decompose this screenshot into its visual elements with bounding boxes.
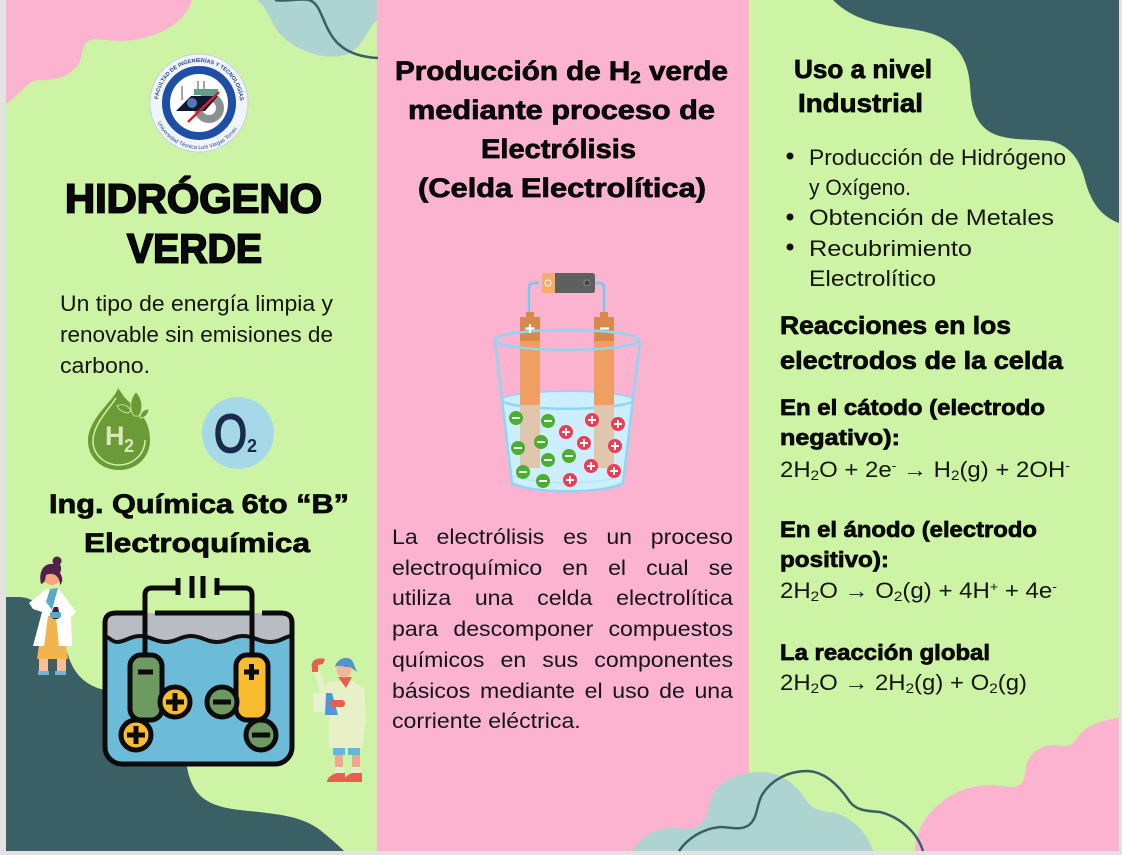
blob: bottom-right pink <box>915 718 1119 851</box>
text block: anode reaction: 2 <box>894 588 903 604</box>
panel: middle pink background <box>377 0 749 851</box>
text block: anode reaction: + <box>990 579 998 594</box>
text block: electrolysis description <box>392 526 733 733</box>
icon: electrolysis beaker <box>495 273 640 491</box>
blob: top-right dark <box>833 0 1119 223</box>
text block: anode reaction: positivo): <box>780 547 889 572</box>
text block: cathode reaction: - <box>1065 458 1070 473</box>
text block: anode reaction: - <box>1052 579 1057 594</box>
heading: electrolysis title: Producción de H <box>395 56 610 86</box>
text block: anode reaction: 2H <box>780 578 808 603</box>
icon: H2 green drop <box>88 388 150 470</box>
text block: global reaction: 2 <box>989 680 998 696</box>
text block: definition: Un tipo de energía limpia y <box>60 291 333 316</box>
blob: top teal <box>257 0 377 57</box>
heading: electrolysis title <box>395 56 728 203</box>
text block: cathode reaction: 2 <box>811 467 819 483</box>
panel: right green background <box>749 0 1119 851</box>
curve: top dark line <box>275 0 378 58</box>
heading: electrolysis title: (Celda Electrolítica) <box>418 173 706 203</box>
heading: electrode reactions: electrodos de la celda <box>780 347 1064 375</box>
icon: H2 green drop: H <box>105 421 124 451</box>
text block: global reaction <box>780 640 1027 696</box>
text block: cathode reaction: negativo): <box>780 425 900 450</box>
text block: anode reaction: O → O <box>819 578 894 603</box>
text block: cathode reaction: En el cátodo (electrodo <box>780 395 1045 420</box>
heading: electrolysis title: 2 <box>630 68 641 87</box>
heading: course <box>49 489 349 558</box>
text block: global reaction: (g) <box>998 670 1027 695</box>
text block: anode reaction: En el ánodo (electrodo <box>780 517 1037 542</box>
text block: cathode reaction <box>780 395 1070 483</box>
text block: definition: carbono. <box>60 353 150 378</box>
text block: anode reaction: + 4e <box>998 578 1052 603</box>
panel: left green background <box>6 0 377 851</box>
icon: man scientist <box>312 658 366 782</box>
text block: global reaction: La reacción global <box>780 640 990 665</box>
title: VERDE <box>127 226 262 272</box>
list: industrial uses <box>786 145 1066 291</box>
text block: anode reaction <box>780 517 1057 604</box>
blob: bottom teal <box>632 772 873 851</box>
text block: anode reaction: 2 <box>811 588 819 604</box>
text block: global reaction: 2 <box>811 680 819 696</box>
text block: cathode reaction: O + 2e <box>819 457 892 482</box>
text block: electrolysis description: La electrólisis es un proceso <box>392 526 733 549</box>
list: industrial uses: Producción de Hidrógeno <box>809 145 1066 170</box>
blob: bottom-left dark <box>6 597 344 851</box>
curve: bottom dark line <box>679 771 923 851</box>
text block: cathode reaction: 2H <box>780 457 808 482</box>
title <box>65 176 322 272</box>
logo: university emblem: Universidad Técnica Luis Vargas Torres <box>158 121 237 149</box>
text block: cathode reaction: 2 <box>951 467 960 483</box>
icon: O2 blue circle <box>202 397 274 469</box>
text block: global reaction: 2 <box>906 680 914 696</box>
text block: electrolysis description: electroquímico en el cual se <box>392 557 733 580</box>
text block: global reaction: (g) + O <box>914 670 989 695</box>
heading: course: Ing. Química 6to “B” <box>49 489 349 519</box>
heading: electrolysis title: verde <box>641 56 728 86</box>
text block: definition <box>60 291 333 378</box>
list: industrial uses: Obtención de Metales <box>809 205 1054 230</box>
text block: anode reaction: (g) + 4H <box>902 578 990 603</box>
text block: global reaction: O → 2H <box>819 670 906 695</box>
heading: course: Electroquímica <box>84 528 311 558</box>
icon: woman scientist <box>29 556 76 675</box>
logo: university emblem: FACULTAD DE INGENIERÍAS Y TECNOLOGÍAS <box>154 58 244 100</box>
text block: cathode reaction: (g) + 2OH <box>959 457 1065 482</box>
text block: electrolysis description: para descomponer compuestos <box>392 618 733 641</box>
list: industrial uses: y Oxígeno. <box>809 175 911 200</box>
list: industrial uses: Electrolítico <box>809 266 936 291</box>
title: HIDRÓGENO <box>65 176 322 222</box>
logo: university emblem <box>150 54 248 152</box>
heading: industrial use: Industrial <box>798 88 923 118</box>
text block: definition: renovable sin emisiones de <box>60 322 333 347</box>
icon: O2 blue circle: O <box>214 404 247 464</box>
list: industrial uses: Recubrimiento <box>809 236 972 261</box>
text block: electrolysis description: químicos en sus componentes <box>392 649 733 672</box>
text block: cathode reaction: - <box>892 458 896 473</box>
icon: H2 green drop: 2 <box>124 436 134 456</box>
heading: electrolysis title: mediante proceso de <box>408 95 715 125</box>
icon: electrochemical cell <box>105 576 292 764</box>
blob: top-left pink <box>6 0 192 104</box>
text block: electrolysis description: corriente eléctrica. <box>392 710 581 733</box>
text block: electrolysis description: básicos mediante el uso de una <box>392 680 733 703</box>
heading: industrial use <box>794 54 932 118</box>
heading: electrode reactions: Reacciones en los <box>780 312 1011 340</box>
text block: global reaction: 2H <box>780 670 808 695</box>
text block: cathode reaction: → H <box>896 457 951 482</box>
heading: electrode reactions <box>780 312 1064 375</box>
heading: industrial use: Uso a nivel <box>794 54 932 84</box>
text block: electrolysis description: utiliza una celda electrolítica <box>392 587 733 610</box>
icon: O2 blue circle: 2 <box>247 436 257 456</box>
heading: electrolysis title: Electrólisis <box>481 134 636 164</box>
